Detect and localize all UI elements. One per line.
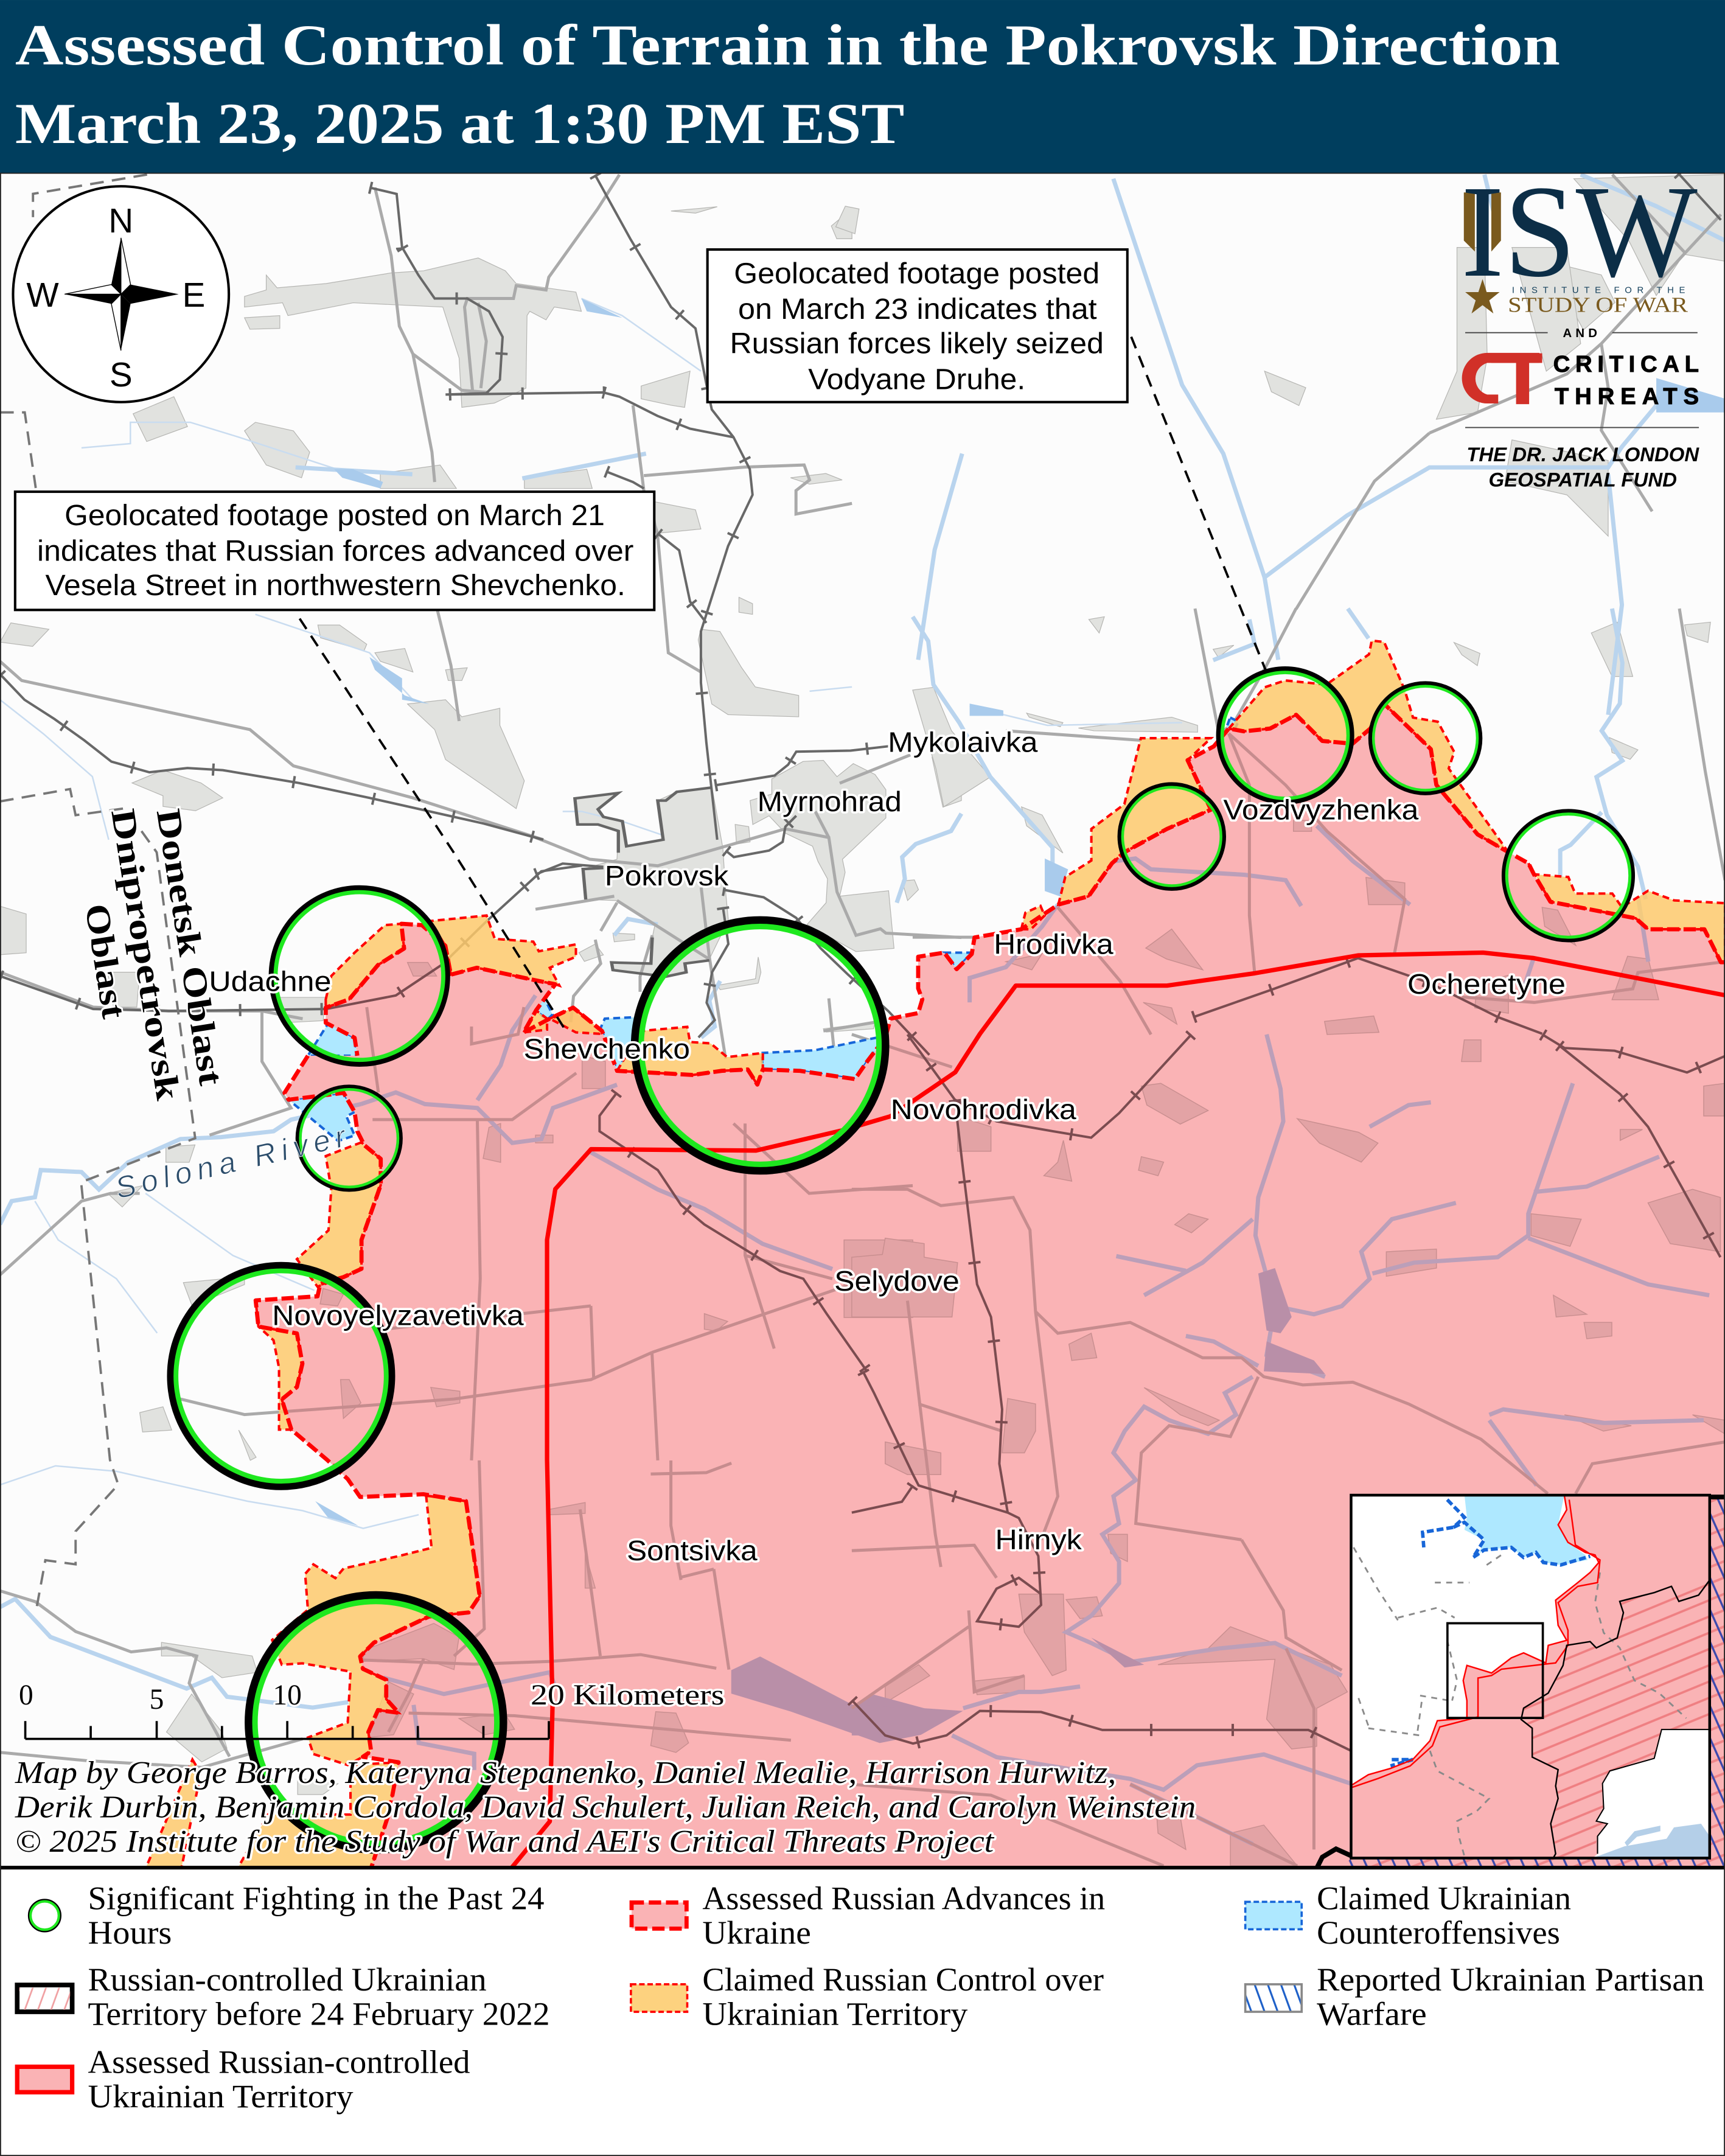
claimed Russian control areas xyxy=(145,641,1725,1868)
map bottom border xyxy=(0,1867,1725,1869)
legend: significant fighting: Significant Fighting in the Past 24 xyxy=(88,1880,545,1917)
legend: claimed Russian control: Claimed Russian Control over xyxy=(702,1961,1104,1998)
inset: claimed Ukrainian area xyxy=(1465,1495,1587,1565)
legend: significant fighting xyxy=(29,1880,545,1951)
legend: claimed counteroffensives: Claimed Ukrainian xyxy=(1317,1880,1571,1917)
inset: occupied territory xyxy=(1351,1495,1710,1858)
legend: significant fighting: Hours xyxy=(88,1914,172,1951)
significant fighting circles xyxy=(170,669,1633,1849)
leader line: Shevchenko callout xyxy=(299,619,568,1034)
logo: ISW: STUDY OF WAR xyxy=(1508,293,1688,316)
logo: Critical Threats xyxy=(1462,351,1699,410)
scale bar: 5 xyxy=(150,1684,164,1715)
credits: © 2025 Institute for the Study of War and AEI's Critical Threats Project xyxy=(15,1824,995,1859)
compass: N xyxy=(108,201,133,240)
scale bar xyxy=(19,1680,724,1739)
credits: Derik Durbin, Benjamin Cordola, David Schulert, Julian Reich, and Carolyn Weinstein xyxy=(15,1790,1196,1824)
inset: sea xyxy=(1592,1824,1710,1858)
place labels: Novoyelyzavetivka xyxy=(272,1300,524,1331)
fighting circle: north-east of Ocheretyne xyxy=(1504,811,1633,940)
inset: Ukrainian claim dashes xyxy=(1390,1499,1590,1766)
place labels: Novohrodivka xyxy=(891,1094,1076,1125)
fighting circle: east of Vozdvyzhenka xyxy=(1370,683,1480,793)
title xyxy=(15,13,1560,156)
callout: Vodyane Druhe: Geolocated footage posted xyxy=(734,257,1099,290)
scale bar: 10 xyxy=(273,1680,302,1711)
legend: assessed advances: Assessed Russian Advances in xyxy=(702,1880,1105,1917)
legend: claimed counteroffensives xyxy=(1246,1880,1571,1951)
inset: Frontline xyxy=(1353,1495,1600,1787)
legend: pre-2022 territory xyxy=(17,1961,550,2032)
place labels: Selydove xyxy=(834,1265,960,1297)
Ukrainian-held claimed counteroffensives xyxy=(288,717,1238,1141)
callout: Vodyane Druhe: Vodyane Druhe. xyxy=(808,363,1025,396)
logo: Critical Threats: CRITICAL xyxy=(1553,351,1699,377)
place labels: Ocheretyne xyxy=(1407,968,1566,1000)
place labels xyxy=(209,727,1566,1566)
fighting circle: Novoyelyzavetivka xyxy=(170,1265,392,1487)
callout: Shevchenko: Geolocated footage posted on March 21 xyxy=(64,499,605,532)
place labels: Sontsivka xyxy=(627,1535,758,1566)
assessed Russian-controlled territory xyxy=(256,704,1725,1868)
assessed Russian advances frontline xyxy=(256,704,1725,1868)
scale bar: 20 Kilometers xyxy=(531,1680,724,1711)
fighting circle: Udachne xyxy=(271,888,447,1064)
legend: assessed Russian-controlled: Assessed Russian-controlled xyxy=(88,2044,470,2081)
place labels: Mykolaivka xyxy=(888,727,1038,758)
inset: south white area xyxy=(1592,1729,1710,1858)
callout: Shevchenko xyxy=(15,492,654,610)
inset: pre-2022 border xyxy=(1521,1580,1710,1858)
legend xyxy=(0,1869,1725,2156)
oblast labels: Donetsk Oblast xyxy=(149,806,230,1088)
legend: claimed counteroffensives: Counteroffensives xyxy=(1317,1914,1560,1951)
place labels: Hrodivka xyxy=(994,929,1113,960)
logo: ISW: ISW xyxy=(1461,158,1698,304)
base settlements xyxy=(0,175,1725,1866)
logo: ISW: AND xyxy=(1563,327,1597,340)
Russian-controlled line before recent advances xyxy=(511,952,1725,1868)
legend: claimed Russian control xyxy=(631,1961,1104,2032)
inset: frame xyxy=(1351,1495,1710,1858)
logo: ISW: INSTITUTE FOR THE xyxy=(1512,286,1685,296)
header band xyxy=(0,0,1725,173)
oblast labels: Dnipropetrovsk xyxy=(103,806,187,1103)
callout: Vodyane Druhe xyxy=(708,249,1127,402)
compass: E xyxy=(183,276,205,314)
place labels: Hirnyk xyxy=(995,1524,1082,1555)
fighting circle: Solona River xyxy=(298,1087,400,1190)
leader line: Vodyane Druhe callout xyxy=(1131,337,1266,671)
oblast boundary xyxy=(0,175,195,1613)
base railways xyxy=(0,173,1725,1752)
credits xyxy=(15,1756,1196,1859)
scale bar: 0 xyxy=(19,1680,33,1711)
legend: assessed advances: Ukraine xyxy=(702,1914,811,1951)
place labels: Udachne xyxy=(209,966,331,997)
callout: Vodyane Druhe: Russian forces likely seized xyxy=(730,327,1104,360)
title: March 23, 2025 at 1:30 PM EST xyxy=(15,91,904,156)
legend: partisan warfare: Reported Ukrainian Partisan xyxy=(1317,1961,1704,1998)
fighting circle: south of Pokrovsk xyxy=(635,920,885,1171)
credits: Map by George Barros, Kateryna Stepanenko, Daniel Mealie, Harrison Hurwitz, xyxy=(15,1756,1116,1790)
Pokrovsk outline xyxy=(575,787,712,977)
fighting circle: south-west xyxy=(249,1596,503,1849)
compass xyxy=(13,186,229,402)
callout: Vodyane Druhe: on March 23 indicates that xyxy=(738,293,1097,326)
legend: pre-2022 territory: Russian-controlled Ukrainian xyxy=(88,1961,487,1998)
compass: W xyxy=(26,276,59,314)
legend: claimed Russian control: Ukrainian Territory xyxy=(702,1995,967,2032)
reservoir xyxy=(731,1656,962,1743)
legend: assessed Russian-controlled: Ukrainian Territory xyxy=(88,2078,354,2115)
logo: ISW xyxy=(1461,158,1699,491)
place labels: Pokrovsk xyxy=(605,860,729,891)
compass: S xyxy=(110,355,133,394)
legend: assessed Russian-controlled xyxy=(17,2044,470,2115)
inset: oblast boundaries xyxy=(1354,1547,1686,1857)
legend: pre-2022 territory: Territory before 24 February 2022 xyxy=(88,1995,550,2032)
callout: Shevchenko: indicates that Russian forces advanced over xyxy=(37,535,633,568)
base roads xyxy=(0,175,1725,1866)
map panel xyxy=(0,158,1725,1868)
fighting circle: Vodyane Druhe xyxy=(1219,669,1352,802)
place labels: Vozdvyzhenka xyxy=(1223,794,1419,825)
pre-2022 occupied hatch area xyxy=(1317,1497,1725,1868)
map features under occupied territory xyxy=(0,173,1725,1866)
logo: Critical Threats: THREATS xyxy=(1555,383,1699,410)
legend: partisan warfare xyxy=(1246,1961,1704,2032)
inset: pre-2022 occupied area xyxy=(1521,1580,1710,1858)
inset: map extent box xyxy=(1448,1624,1543,1718)
legend: assessed advances xyxy=(632,1880,1105,1951)
place labels: Shevchenko xyxy=(524,1033,690,1064)
river label: Solona River: Solona River xyxy=(112,1118,354,1205)
place labels: Myrnohrad xyxy=(758,786,902,817)
base rivers xyxy=(0,175,1725,1844)
fighting circle: west of Vozdvyzhenka xyxy=(1120,784,1224,888)
callout: Shevchenko: Vesela Street in northwestern Shevchenko. xyxy=(46,569,626,602)
oblast labels: Oblast xyxy=(77,901,133,1021)
oblast labels xyxy=(77,806,230,1103)
logo: ISW: THE DR. JACK LONDON xyxy=(1466,443,1699,466)
inset locator map xyxy=(1351,1495,1710,1858)
legend: partisan warfare: Warfare xyxy=(1317,1995,1427,2032)
logo: ISW: GEOSPATIAL FUND xyxy=(1488,469,1677,491)
title: Assessed Control of Terrain in the Pokrovsk Direction xyxy=(15,13,1560,77)
